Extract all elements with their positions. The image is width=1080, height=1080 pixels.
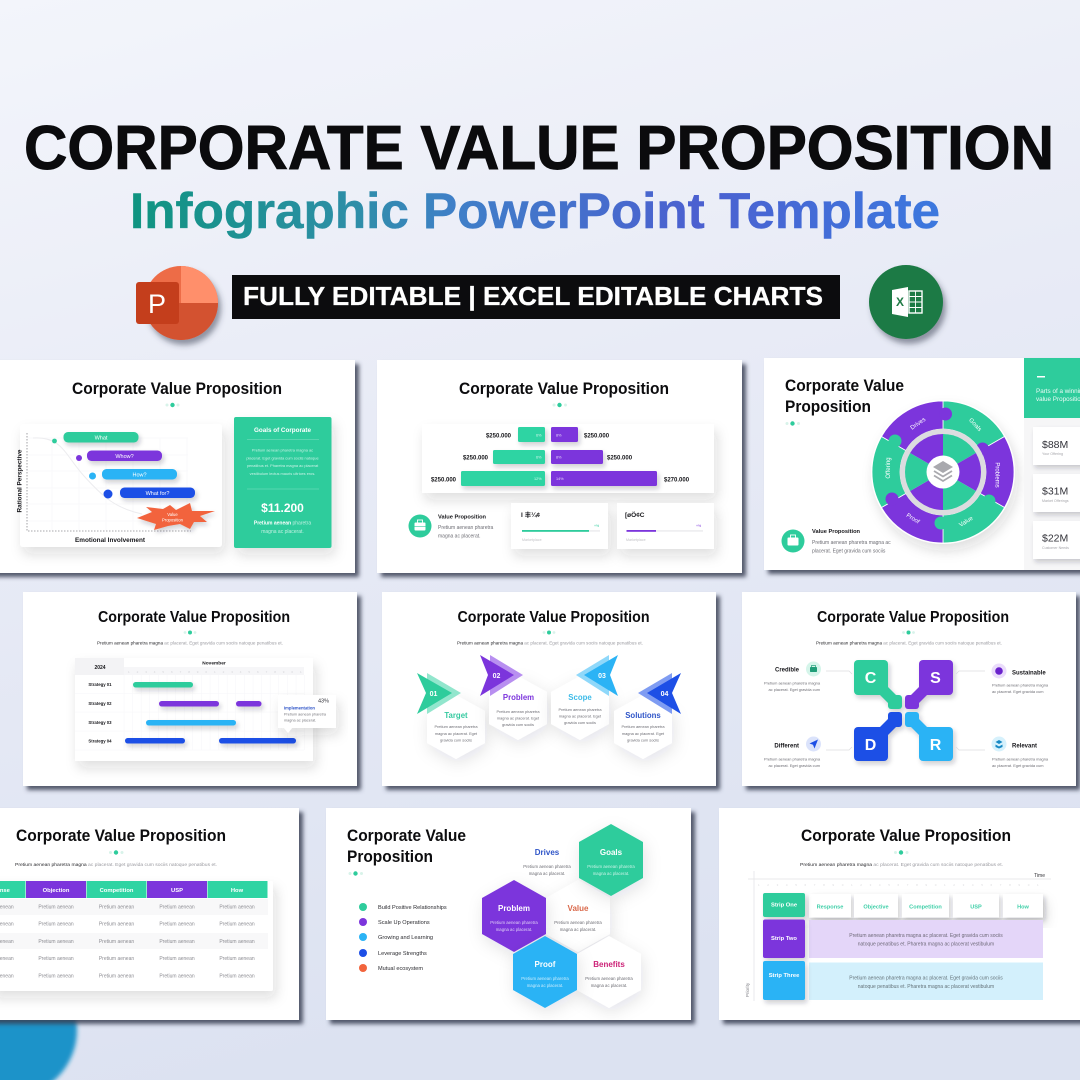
table: Pretium aenean: [38, 956, 74, 962]
callout: relevant: [956, 736, 1049, 768]
heading: Corporate Value: [785, 376, 904, 395]
step: target: Pretium aenean pharetra: [434, 724, 478, 729]
heading: Corporate Value Proposition: [817, 609, 1009, 626]
callout: credible: ac placerat. Eget gravida cum: [769, 687, 820, 692]
pill: Whow: Whow?: [115, 454, 134, 460]
table: Pretium aenean: [219, 922, 255, 928]
block: R: [905, 712, 953, 761]
step: scope: [551, 655, 618, 740]
inner wedges: [905, 434, 981, 510]
pagination dots: [109, 850, 124, 855]
header cells: [809, 894, 1043, 918]
step: problem: magna ac placerat. Eget: [497, 716, 540, 720]
callout: sustainable: ac placerat. Eget gravida cum: [992, 689, 1043, 694]
pagination dots: [902, 630, 915, 634]
panel: goals of corporate: [234, 417, 332, 548]
butterfly bar chart: 6%: [536, 434, 542, 438]
step: problem: [480, 655, 547, 740]
hex: problem: Pretium aenean pharetra: [490, 920, 538, 925]
panel: slide 7 comparison table: [0, 808, 299, 1020]
panel: slide 6 CSDR matrix: [742, 592, 1076, 786]
label: strip two: [763, 920, 805, 958]
step: problem: 02: [493, 673, 500, 680]
table: Pretium aenean: [99, 922, 134, 928]
icon: briefcase: [408, 514, 432, 538]
hex: proof: magna ac placerat.: [527, 983, 563, 988]
gantt chart: Strategy 03: [88, 720, 112, 725]
header cells: Response: [817, 904, 843, 910]
table: Pretium aenean: [159, 904, 195, 910]
callout: relevant: ac placerat. Eget gravida cum: [992, 763, 1043, 768]
icon: PowerPoint: P: [148, 289, 166, 319]
step: target: magna ac placerat. Eget: [435, 731, 478, 736]
hex: proof: Proof: [535, 960, 556, 969]
butterfly bar chart: $250.000: [584, 434, 610, 440]
hex: drives: Pretium aenean pharetra: [523, 864, 571, 869]
block: D: D: [865, 737, 876, 754]
table: Competition: [100, 888, 134, 894]
card: metric one: +%: [594, 524, 599, 528]
callout: different: Different: [774, 744, 799, 750]
table: Objection: [43, 888, 70, 894]
hex: benefits: Pretium aenean pharetra: [585, 976, 633, 981]
step: scope: Pretium aenean pharetra: [558, 707, 602, 712]
axes: [745, 871, 1051, 1001]
panel: goals of corporate: Pretium aenean: [254, 520, 291, 526]
hex: drives: [515, 824, 579, 896]
tooltip: implementation: magna ac placerat.: [284, 718, 316, 722]
panel: goals of corporate: placerat. Eget gravida cum sociis natoque: [246, 456, 319, 460]
icon: briefcase: [782, 530, 804, 552]
butterfly bar chart: 8%: [556, 434, 562, 438]
card: metric two: +%: [696, 524, 701, 528]
step: scope: Scope: [568, 693, 592, 702]
butterfly bar chart: $250.000: [463, 456, 489, 462]
step: target: Target: [444, 711, 468, 720]
panel: goals of corporate: Goals of Corporate: [254, 427, 312, 434]
butterfly bar chart: 8%: [556, 456, 562, 460]
subheading: Pretium aenean pharetra magna ac placerat. Eget gravida cum sociis natoque penatibus et.: [800, 862, 1003, 867]
banner: fully editable: FULLY EDITABLE | EXCEL EDITABLE CHARTS: [243, 281, 823, 311]
pill: How: How?: [132, 472, 147, 478]
table: Pretium aenean: [159, 922, 195, 928]
band: strip two: Pretium aenean pharetra magna ac placerat. Eget gravida cum sociis: [849, 933, 1003, 939]
tooltip: implementation: 43%: [318, 698, 329, 704]
gantt chart: 2024: [94, 665, 106, 671]
stat card: 88M: $88M: [1042, 439, 1068, 451]
pagination dots: [786, 421, 800, 426]
text: value proposition: [438, 514, 494, 540]
table: USP: [171, 888, 183, 894]
panel: slide 3 puzzle wheel: [764, 358, 1080, 570]
text: value proposition: Pretium aenean pharetra: [438, 525, 494, 531]
callout: sustainable: [956, 664, 1049, 694]
card: metric two: Marketplace: [626, 538, 646, 542]
table: Pretium aenean: [159, 974, 195, 980]
hex: goals: Pretium aenean pharetra: [587, 864, 635, 869]
segment labels: Goals: [967, 418, 982, 433]
block: S: S: [930, 670, 941, 687]
panel: slide 9 strip matrix: [719, 808, 1080, 1020]
decorative blue blob: [0, 963, 77, 1080]
subtitle: Infographic PowerPoint Template: [130, 183, 940, 239]
band: strip three: natoque penatibus et. Pharetra magna ac placerat vestibulum: [858, 984, 994, 990]
callout: credible: Pretium aenean pharetra magna: [764, 680, 821, 686]
callout: different: ac placerat. Eget gravida cum: [769, 763, 820, 768]
header cells: How: [1017, 904, 1030, 910]
butterfly bar chart: $250.000: [431, 478, 457, 484]
hex: value: Pretium aenean pharetra: [554, 920, 602, 925]
panel: goals of corporate: penatibus et. Pharetra magna ac placerat: [247, 463, 319, 468]
hex: value: [546, 880, 610, 952]
butterfly bar chart: [422, 424, 714, 493]
panel: slide 2 butterfly bars: [377, 360, 742, 573]
axes: Time: [1034, 873, 1045, 879]
gantt chart: 123456789012345678901: [128, 670, 302, 674]
step: scope: gravida cum sociis: [564, 720, 596, 725]
pagination dots: [543, 630, 555, 634]
pagination dots: [348, 871, 363, 876]
gantt chart: Strategy 01: [88, 682, 112, 687]
step: target: [417, 673, 485, 759]
hex: goals: [579, 824, 643, 896]
header cells: Competition: [909, 904, 942, 910]
step: problem: Pretium aenean pharetra: [496, 709, 540, 714]
block: S: [905, 660, 953, 709]
heading: Corporate Value Proposition: [459, 379, 669, 398]
banner: fully editable: [232, 275, 840, 319]
hex: proof: Pretium aenean pharetra: [521, 976, 569, 981]
chart markers: [52, 439, 112, 498]
icon: PowerPoint: [136, 266, 218, 340]
segment labels: Value: [959, 515, 975, 529]
butterfly bar chart: $270.000: [664, 478, 690, 484]
x axis label: Emotional Involvement: [75, 537, 146, 544]
subheading: Pretium aenean pharetra magna ac placerat. Eget gravida cum sociis natoque penatibus et.: [457, 640, 643, 646]
step: scope: 03: [598, 673, 606, 680]
hex: benefits: Benefits: [593, 960, 625, 969]
pagination dots: [166, 403, 180, 407]
heading: Corporate Value Proposition: [801, 826, 1011, 845]
callout: credible: Credible: [775, 668, 800, 674]
band: strip two: [809, 920, 1043, 958]
heading: Corporate Value Proposition: [98, 609, 290, 626]
table: Pretium aenean: [38, 939, 74, 945]
hex: problem: magna ac placerat.: [496, 927, 532, 932]
table: Pretium aenean: [99, 956, 134, 962]
segment labels: Problems: [994, 462, 1000, 488]
tooltip: implementation: Pretium aenean pharetra: [284, 712, 327, 716]
hex: problem: [482, 880, 546, 952]
list: five points: Mutual ecosystem: [378, 966, 423, 972]
label: strip one: [763, 893, 805, 917]
table: Pretium aenean: [219, 974, 255, 980]
table: Pretium aenean: [219, 904, 255, 910]
gantt chart: Strategy 02: [88, 701, 112, 706]
butterfly bar chart: 14%: [556, 477, 564, 481]
icon: Excel: [869, 265, 943, 339]
text: value proposition: magna ac placerat.: [438, 534, 481, 540]
step: problem: Problem: [503, 693, 534, 702]
card: metric one: Marketplace: [522, 538, 542, 542]
butterfly bar chart: $250.000: [486, 434, 512, 440]
segment labels: Drives: [910, 417, 927, 432]
step: scope: magna ac placerat. Eget: [559, 714, 602, 718]
stat card: 22M: [1033, 521, 1080, 559]
block: C: C: [865, 670, 877, 687]
list: five points: Build Positive Relationships: [378, 905, 447, 911]
butterfly bar chart: 6%: [536, 456, 542, 460]
pill: How: [102, 469, 177, 480]
step: solutions: Solutions: [625, 711, 661, 720]
text: value proposition: [812, 529, 891, 554]
panel: slide 5 arrows and hexagons: [382, 592, 716, 786]
axes: Priority: [745, 982, 750, 997]
pill: What: What: [95, 436, 108, 442]
hex: drives: magna ac placerat.: [529, 871, 565, 876]
callout: different: Pretium aenean pharetra magna: [764, 756, 821, 762]
stat: value: $11.200: [261, 501, 304, 515]
sidebar: [1024, 358, 1080, 570]
table: Pretium aenean: [38, 974, 74, 980]
callout: relevant: Pretium aenean pharetra magna: [992, 756, 1049, 762]
icon: Excel: X: [896, 295, 904, 309]
card: metric two: [617, 503, 714, 549]
stat card: 88M: Your Offering: [1042, 452, 1063, 456]
segment labels: Offering: [886, 457, 892, 479]
step: problem: gravida cum sociis: [502, 722, 534, 727]
pagination dots: [552, 403, 567, 407]
tooltip: implementation: Implementation: [284, 706, 315, 710]
segment labels: Proof: [905, 513, 920, 526]
step: solutions: gravida cum sociis: [627, 738, 659, 742]
step: solutions: 04: [661, 691, 668, 698]
callout: relevant: Relevant: [1012, 744, 1037, 750]
block: D: [854, 712, 902, 761]
band: strip three: Pretium aenean pharetra magna ac placerat. Eget gravida cum sociis: [849, 976, 1003, 982]
text: value proposition: Pretium aenean pharetra magna ac: [812, 540, 891, 546]
block: C: [854, 660, 902, 709]
table: Pretium aenean: [159, 939, 195, 945]
band: strip three: [809, 962, 1043, 1000]
stat card: 31M: Market Offerings: [1042, 499, 1069, 503]
label: strip three: Strip Three: [769, 973, 800, 979]
table: Pretium aenean: [219, 956, 255, 962]
pill: What for: [120, 488, 195, 498]
pagination dots: [894, 850, 908, 855]
panel: goals of corporate: pharetra: [291, 520, 311, 526]
stat card: 22M: Customer Needs: [1042, 546, 1069, 550]
hex: goals: Goals: [600, 848, 623, 857]
axes: 1234567890123456789012345678901: [758, 883, 1039, 887]
panel: slide 1 quadrant chart: [0, 360, 355, 573]
stat card: 31M: [1033, 474, 1080, 512]
title: CORPORATE VALUE PROPOSITION: [24, 114, 1054, 183]
subheading: Pretium aenean pharetra magna ac placerat. Eget gravida cum sociis natoque penatibus et.: [97, 640, 283, 646]
hex: problem: Problem: [498, 904, 530, 913]
callout: different: [764, 736, 852, 768]
heading: Corporate Value Proposition: [16, 826, 226, 845]
list: five points: [359, 903, 447, 972]
panel: goals of corporate: Pretium aenean pharetra magna ac: [252, 448, 313, 452]
step: solutions: magna ac placerat. Eget: [622, 731, 665, 736]
step: solutions: [614, 673, 681, 759]
butterfly bar chart: $250.000: [607, 456, 633, 462]
card: metric one: I 丰¼¢: [521, 510, 541, 519]
table: Pretium aenean: [99, 904, 134, 910]
gantt chart: Strategy 04: [88, 738, 112, 744]
stat card: 22M: $22M: [1042, 532, 1068, 544]
pill: What for: What for?: [146, 491, 169, 497]
hex: value: magna ac placerat.: [560, 927, 596, 932]
stat card: 31M: $31M: [1042, 486, 1068, 498]
step: target: 01: [430, 691, 437, 698]
card: metric two: [øÖ¢C: [625, 510, 645, 519]
table: How: [231, 888, 244, 894]
pagination dots: [184, 630, 196, 634]
heading: Corporate Value Proposition: [458, 609, 650, 626]
line chart panel: [16, 424, 222, 547]
text: value proposition: Value Proposition: [438, 514, 487, 520]
hex: proof: [513, 936, 577, 1008]
panel: slide 4 gantt: [23, 592, 357, 786]
callout: sustainable: Pretium aenean pharetra magna: [992, 682, 1049, 688]
text: value proposition: placerat. Eget gravida cum sociis: [812, 548, 886, 554]
icon: layers: [926, 456, 960, 488]
hex: drives: Drives: [535, 848, 560, 857]
list: five points: Scale Up Operations: [378, 920, 430, 926]
step: solutions: Pretium aenean pharetra: [621, 724, 665, 729]
panel: goals of corporate: vestibulum lectus mauris ultrices eros.: [250, 471, 315, 476]
hex: benefits: [577, 936, 641, 1008]
segment labels: [886, 417, 1000, 529]
list: five points: Growing and Learning: [378, 935, 433, 941]
label: strip two: Strip Two: [771, 936, 797, 942]
pill: What: [64, 432, 138, 442]
header cells: Objective: [863, 904, 889, 910]
starburst: value proposition: [137, 503, 215, 530]
heading: Proposition: [347, 847, 433, 866]
tooltip: implementation: [278, 695, 336, 733]
table: Pretium aenean: [99, 974, 134, 980]
y axis label: Rational Perspective: [16, 449, 24, 512]
stat card: 88M: [1033, 427, 1080, 465]
starburst: value proposition: Value: [167, 512, 178, 517]
table: Pretium aenean: [219, 939, 255, 945]
table: Pretium aenean: [159, 956, 195, 962]
step: target: gravida cum sociis: [440, 738, 472, 742]
table: [0, 881, 273, 991]
block: R: R: [930, 737, 942, 754]
table: Pretium aenean: [38, 922, 74, 928]
panel: slide 8 hexagon cluster: [326, 808, 691, 1020]
subheading: Pretium aenean pharetra magna ac placerat. Eget gravida cum sociis natoque penatibus et.: [15, 862, 217, 867]
heading: Corporate Value: [347, 826, 466, 845]
gantt chart: November: [202, 660, 226, 666]
band: strip two: natoque penatibus et. Pharetra magna ac placerat vestibulum: [858, 942, 994, 948]
text: value proposition: Value Proposition: [812, 529, 861, 535]
card: metric one: [511, 503, 608, 549]
list: five points: Leverage Strengths: [378, 951, 427, 957]
pill: Whow: [87, 450, 162, 461]
callout: credible: [764, 662, 852, 692]
heading: Proposition: [785, 397, 871, 416]
gantt chart: [75, 658, 313, 761]
subheading: Pretium aenean pharetra magna ac placerat. Eget gravida cum sociis natoque penatibus et.: [816, 640, 1002, 646]
label: strip three: [763, 961, 805, 1000]
puzzle wheel chart: [871, 400, 1015, 544]
header cells: USP: [970, 904, 982, 910]
table: Pretium aenean: [38, 904, 74, 910]
heading: Corporate Value Proposition: [72, 379, 282, 398]
hex: benefits: magna ac placerat.: [591, 983, 627, 988]
table: Pretium aenean: [99, 939, 134, 945]
panel: goals of corporate: magna ac placerat.: [261, 529, 304, 535]
hex: goals: magna ac placerat.: [593, 871, 629, 876]
butterfly bar chart: 12%: [534, 477, 542, 481]
starburst: value proposition: Proposition: [162, 518, 184, 522]
callout: sustainable: Sustainable: [1012, 670, 1046, 676]
ring: [902, 432, 984, 512]
label: strip one: Strip One: [771, 902, 798, 908]
hex: value: Value: [568, 904, 589, 913]
